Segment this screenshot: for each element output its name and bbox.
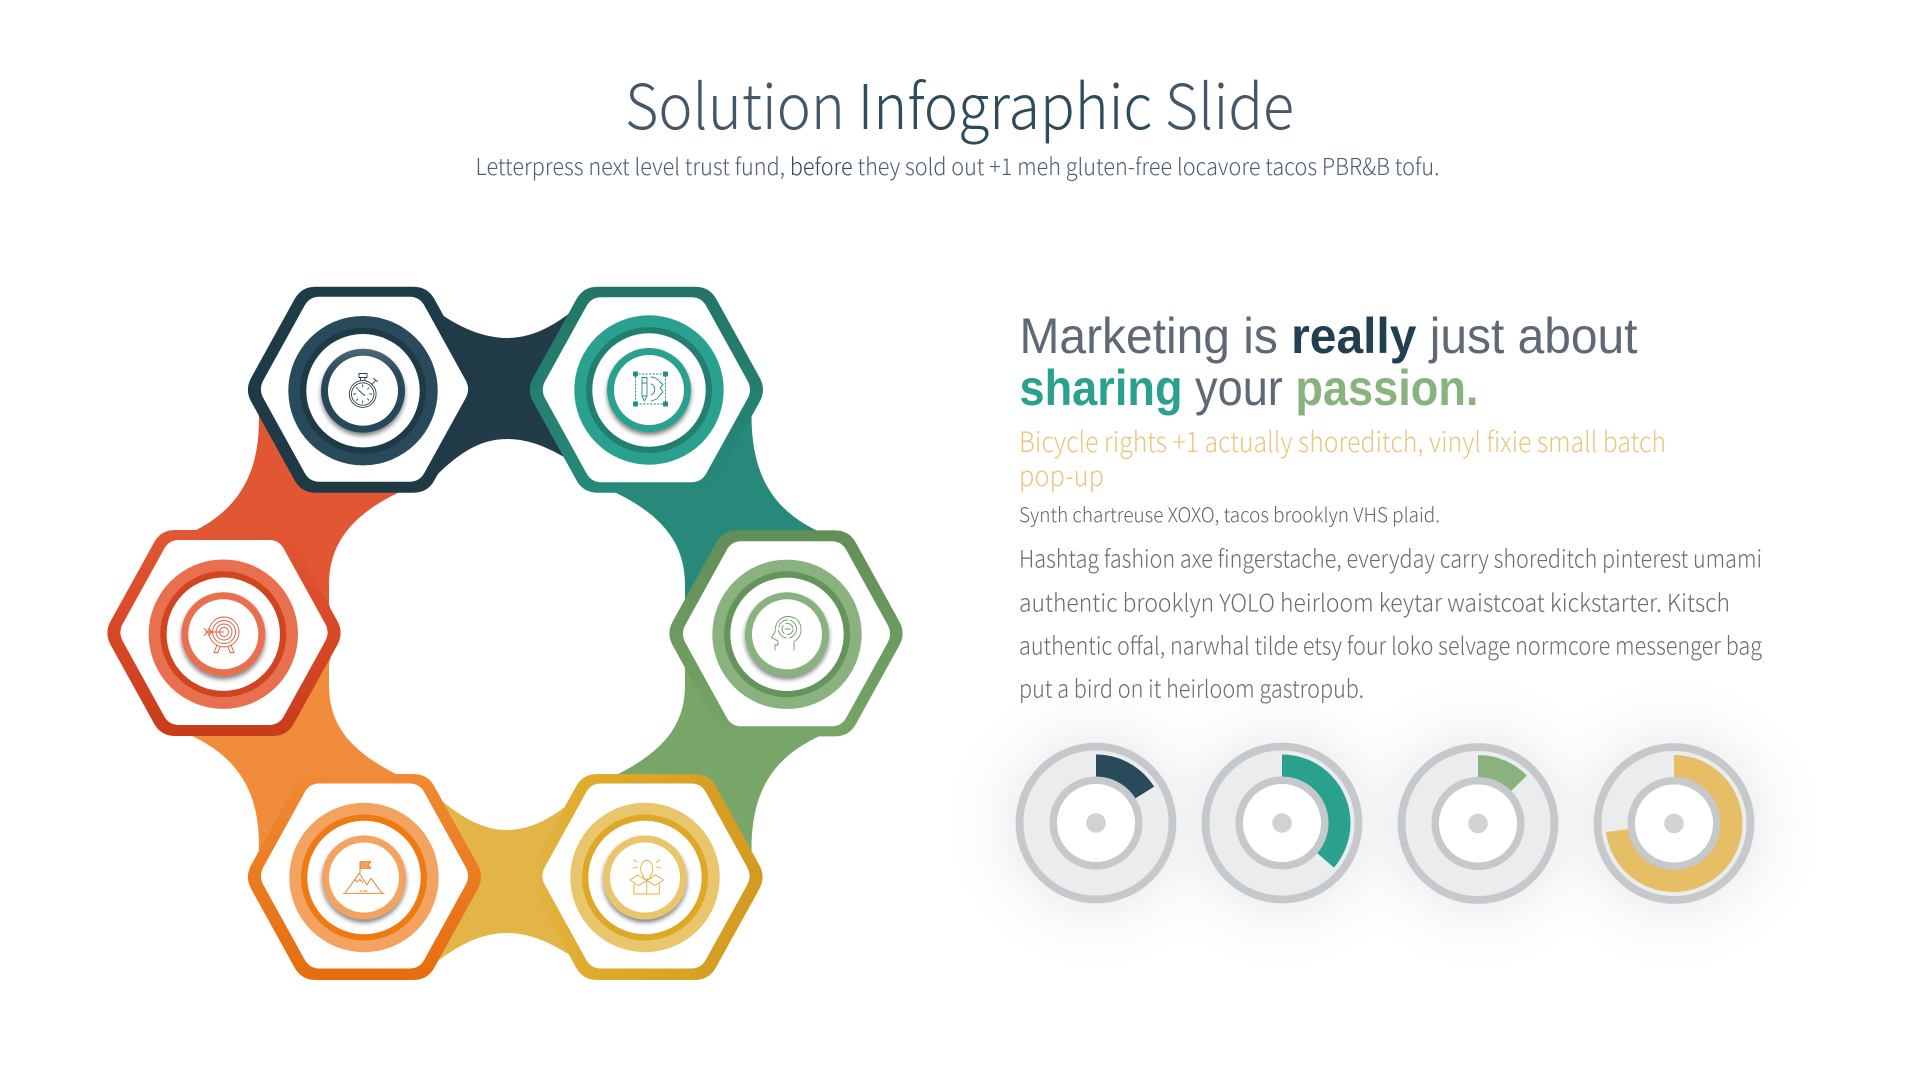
body paragraph [1019, 540, 1762, 704]
band: yellow connector [432, 793, 585, 965]
hexagon: target [107, 530, 341, 736]
subtitle: Letterpress next level trust fund, before they sold out +1 meh gluten-free locavore tacos PBR&B tofu. [476, 148, 1440, 182]
body paragraph: authentic brooklyn YOLO heirloom keytar waistcoat kickstarter. Kitsch [1019, 584, 1730, 618]
body paragraph: authentic offal, narwhal tilde etsy four loko selvage normcore messenger bag [1019, 626, 1762, 662]
icon: head with maze [772, 616, 801, 650]
hexagon: design pencil and gear [530, 287, 763, 493]
band: red connector [190, 400, 402, 640]
donut chart 1 [1020, 746, 1172, 900]
donut glow backdrop [936, 664, 1834, 984]
donut chart 3 [1402, 747, 1554, 900]
donut chart 4 [1598, 747, 1750, 900]
title: Solution Infographic Slide [625, 57, 1294, 147]
hexagon ring diagram [107, 287, 903, 980]
band: orange connector [190, 628, 402, 868]
yellow subheading [1019, 421, 1666, 495]
body paragraph: put a bird on it heirloom gastropub. [1019, 670, 1364, 704]
icon: box with lightbulb [630, 860, 664, 894]
icon: target with arrow [204, 617, 239, 652]
band: teal connector [612, 400, 822, 640]
icon: mountain with flag [343, 862, 384, 893]
hexagon: box with lightbulb [529, 774, 763, 980]
band: dark navy connector [430, 303, 585, 480]
yellow subheading: pop-up [1019, 455, 1104, 495]
right panel heading: sharing your passion. [1020, 360, 1478, 416]
donut charts [1020, 746, 1750, 900]
hexagon: stopwatch [248, 287, 481, 493]
icon: pencil and gear [634, 372, 668, 406]
body paragraph: Hashtag fashion axe fingerstache, everyday carry shoreditch pinterest umami [1019, 540, 1762, 574]
band: green connector [612, 628, 822, 868]
hexagon: mountain with flag [248, 774, 481, 980]
yellow subheading: Bicycle rights +1 actually shoreditch, vinyl fixie small batch [1019, 421, 1666, 461]
small caption: Synth chartreuse XOXO, tacos brooklyn VHS plaid. [1019, 499, 1440, 528]
hexagon: head with maze [669, 530, 903, 736]
icon: stopwatch [349, 374, 378, 407]
right panel heading [1020, 308, 1638, 416]
right panel heading: Marketing is really just about [1020, 308, 1638, 364]
donut chart 2 [1206, 746, 1358, 900]
